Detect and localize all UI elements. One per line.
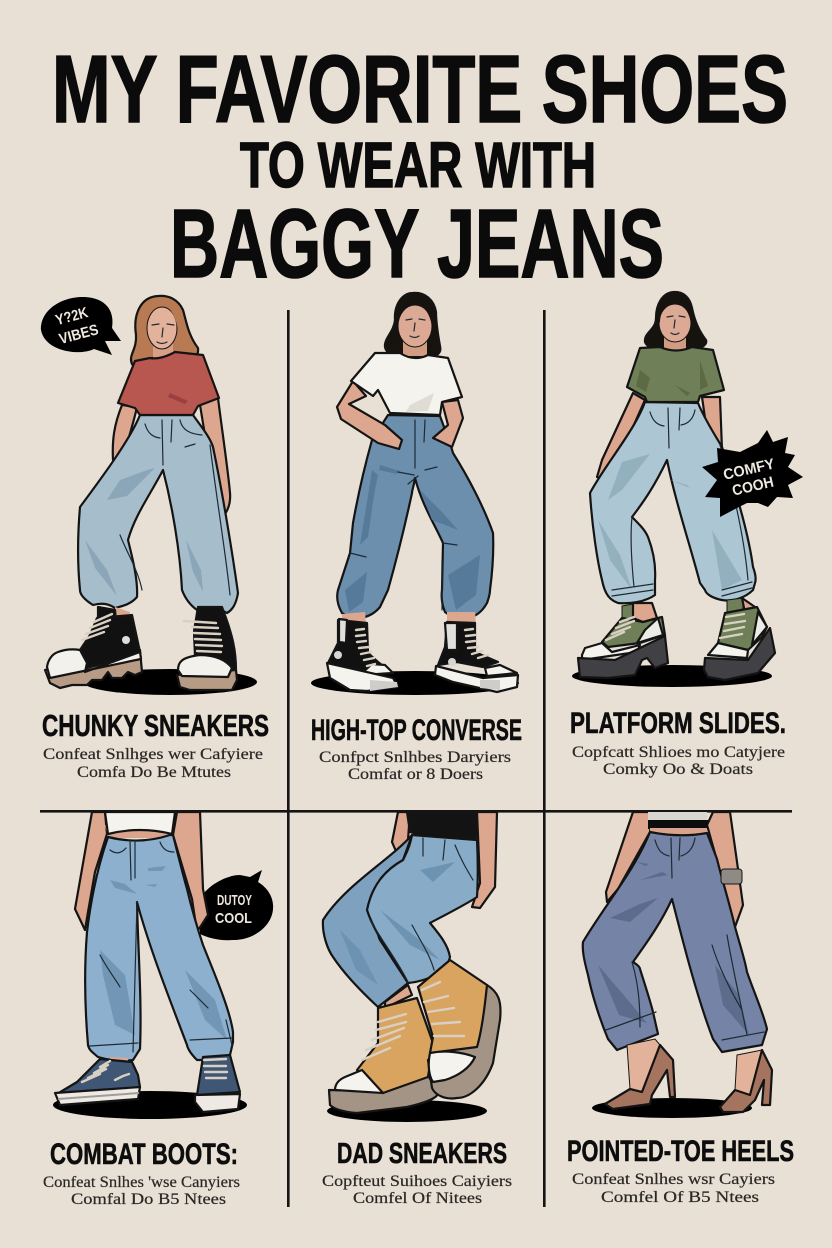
label: combat boots: COMBAT BOOTS: (50, 1138, 238, 1171)
figure: legs in blue jeans with navy sneakers (53, 812, 247, 1119)
burst badge: comfy cool: COMFY (722, 455, 776, 484)
description: chunky sneakers (43, 746, 263, 781)
figure: woman in red tee and light baggy jeans (45, 296, 257, 695)
description: combat boots: Comfal Do B5 Ntees (71, 1191, 226, 1208)
speech bubble: Y2K vibes: VIBES (57, 321, 100, 348)
title: TO WEAR WITH (240, 129, 596, 201)
figure: bent legs in blue jeans with tan sneakers (323, 812, 500, 1122)
description: platform slides: Comky Oo & Doats (603, 761, 753, 778)
description: platform slides: Copfcatt Shlioes mo Catyjere (572, 744, 785, 761)
panel: pointed-toe heels (567, 812, 794, 1206)
label: high-top converse: HIGH-TOP CONVERSE (311, 714, 522, 747)
panel: combat boots (43, 812, 273, 1208)
label: dad sneakers: DAD SNEAKERS (337, 1138, 507, 1170)
description: pointed-toe heels (572, 1171, 775, 1206)
speech bubble: Y2K vibes: Y?2K (54, 304, 90, 329)
description: pointed-toe heels: Confeat Snlhes wsr Cayiers (572, 1171, 775, 1188)
description: dad sneakers: Copfteut Suihoes Caiyiers (322, 1173, 512, 1190)
panel: platform slides (570, 292, 803, 778)
description: platform slides (572, 744, 785, 778)
burst badge: comfy cool (702, 430, 803, 517)
panel: chunky sneakers (41, 296, 269, 781)
description: high-top converse: Confpct Snlhbes Daryiers (319, 749, 511, 766)
description: high-top converse: Comfat or 8 Doers (348, 766, 483, 783)
description: combat boots (43, 1174, 240, 1208)
speech bubble: cool (200, 870, 273, 940)
description: chunky sneakers: Confeat Snlhges wer Cafyiere (43, 746, 263, 763)
speech bubble: cool: DUTOY (217, 892, 252, 909)
description: dad sneakers: Comfel Of Nitees (353, 1190, 482, 1207)
description: combat boots: Confeat Snlhes 'wse Canyiers (43, 1174, 240, 1191)
panel: high-top converse (311, 293, 522, 783)
panel: dad sneakers (322, 812, 512, 1207)
figure: woman in white tee and mid-blue jeans (311, 293, 519, 695)
figure: legs in slate jeans with brown heels (583, 812, 772, 1118)
figure: woman in green tee and pale jeans (572, 292, 775, 687)
speech bubble: cool: COOL (215, 910, 252, 927)
description: dad sneakers (322, 1173, 512, 1207)
speech bubble: Y2K vibes (41, 297, 121, 355)
description: chunky sneakers: Comfa Do Be Mtutes (77, 764, 231, 781)
description: high-top converse (319, 749, 511, 783)
title (52, 36, 788, 298)
label: chunky sneakers: CHUNKY SNEAKERS (42, 708, 269, 743)
burst badge: comfy cool: COOH (731, 474, 775, 500)
description: pointed-toe heels: Comfel Of B5 Ntees (601, 1189, 759, 1206)
